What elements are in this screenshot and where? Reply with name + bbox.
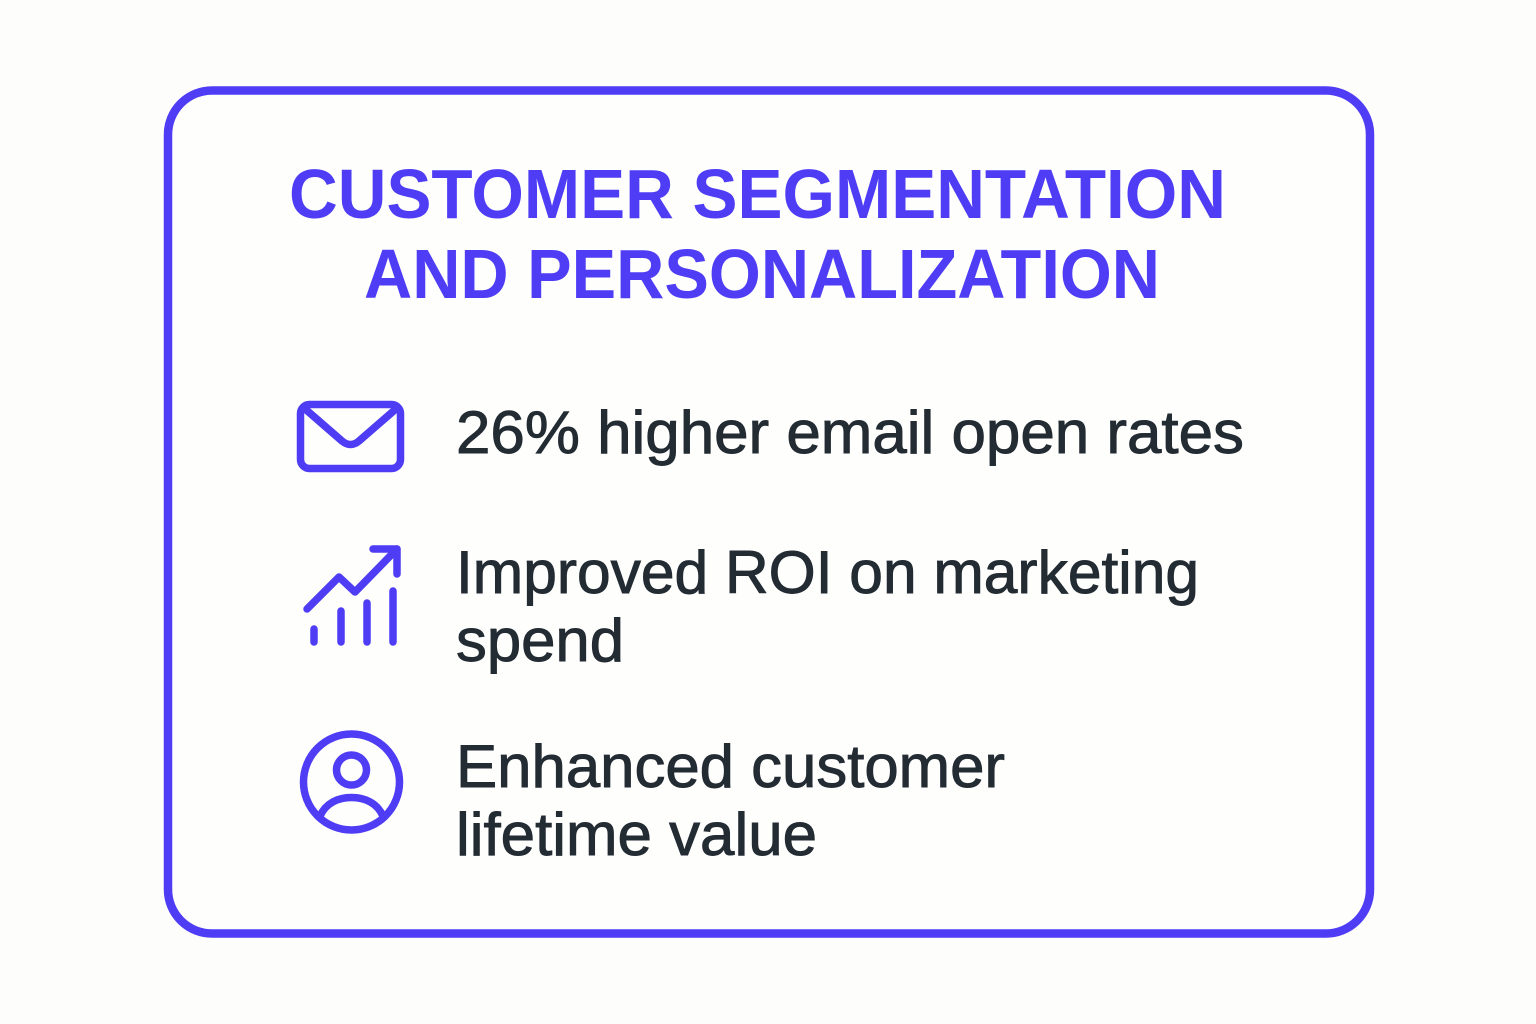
title: CUSTOMER SEGMENTATION [289,155,1226,233]
text: customer lifetime value: lifetime value [456,801,817,868]
icon: rising chart with arrow [307,549,397,642]
title [289,155,1226,313]
text: customer lifetime value [456,733,1005,868]
text: customer lifetime value: Enhanced customer [456,733,1005,800]
text: email open rates: 26% higher email open rates [456,399,1244,466]
text: improved ROI [456,539,1199,674]
panel: card outline [168,90,1370,934]
icon: customer profile [304,734,400,830]
text: improved ROI: Improved ROI on marketing [456,539,1199,606]
icon: email envelope [300,404,400,468]
text: improved ROI: spend [456,607,624,674]
title: AND PERSONALIZATION [364,235,1160,313]
